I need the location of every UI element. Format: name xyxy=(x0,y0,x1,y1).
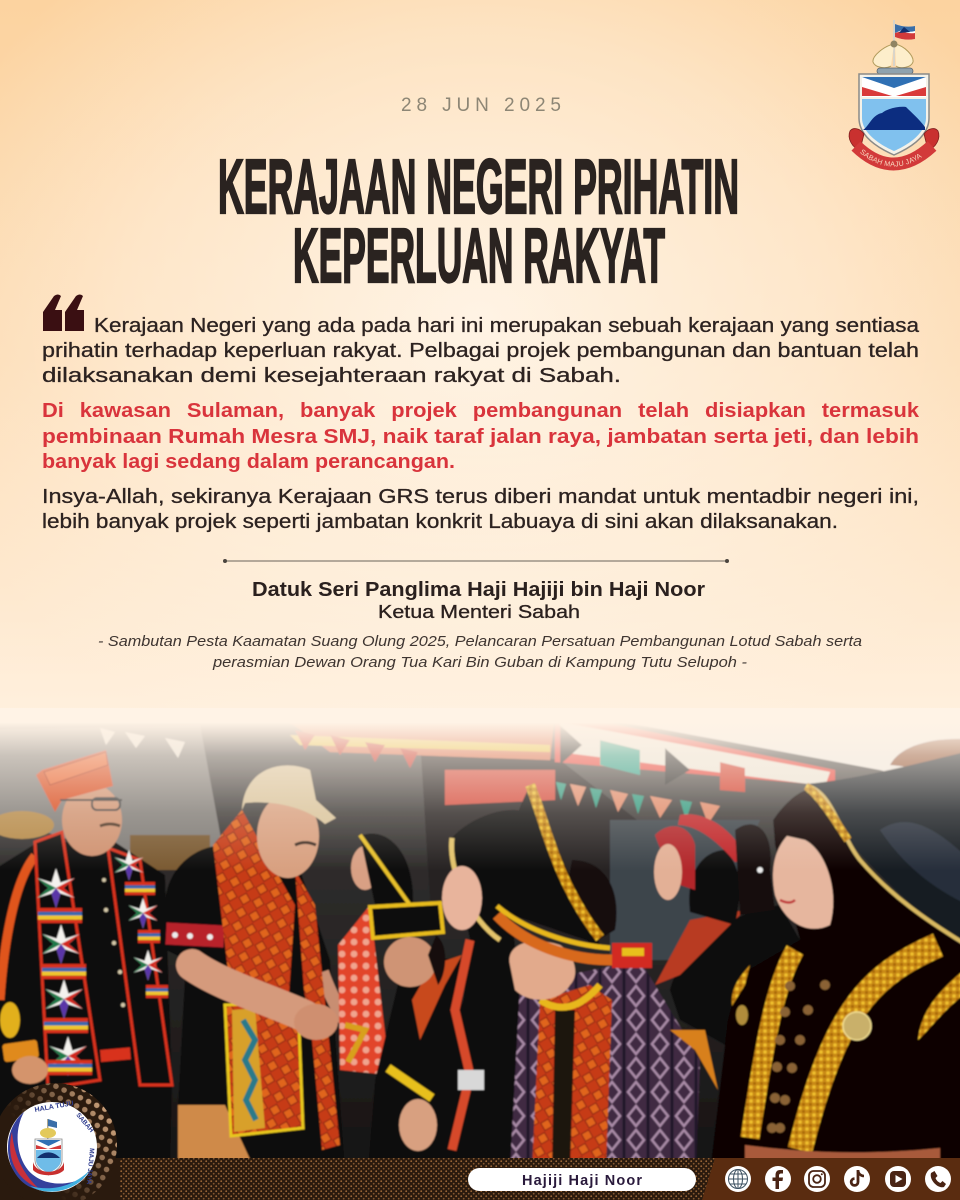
shield xyxy=(859,74,929,155)
event caption: - Sambutan Pesta Kaamatan Suang Olung 2025, Pelancaran Persatuan Pembangunan Lotud Sabah serta xyxy=(98,633,862,650)
icon: globe xyxy=(725,1166,751,1192)
head of state with cap and red sash xyxy=(165,766,345,1170)
photo scene xyxy=(0,726,960,1158)
state crest top right xyxy=(848,20,940,170)
girl with red floral dress xyxy=(338,833,420,1075)
name pill xyxy=(468,1168,696,1191)
speaker name and title: Datuk Seri Panglima Haji Hajiji bin Haji Noor xyxy=(252,579,705,601)
paragraph two highlighted in red: banyak lagi sedang dalam perancangan. xyxy=(42,451,455,473)
bunting and woven tent banners xyxy=(0,712,835,870)
divider line xyxy=(223,559,729,563)
paragraph three: lebih banyak projek seperti jambatan konkrit Labuaya di sini akan dilaksanakan. xyxy=(42,511,838,533)
paragraph two highlighted in red: pembinaan Rumah Mesra SMJ, naik taraf jalan raya, jambatan serta jeti, dan lebih xyxy=(42,426,919,448)
halftone circle xyxy=(0,1080,120,1200)
child in hood xyxy=(398,810,520,1158)
badge ring text: MAJU JAYA xyxy=(85,1148,95,1185)
badge ring text: SABAH xyxy=(74,1112,95,1134)
speaker name and title xyxy=(252,579,705,622)
icon: instagram xyxy=(804,1166,830,1192)
paragraph one: Kerajaan Negeri yang ada pada hari ini merupakan sebuah kerajaan yang sentiasa xyxy=(94,315,920,337)
event caption: perasmian Dewan Orang Tua Kari Bin Guban di Kampung Tutu Selupoh - xyxy=(212,654,747,671)
badge mini crest xyxy=(33,1119,64,1175)
paragraph two highlighted in red xyxy=(42,400,920,473)
ribbon SABAH MAJU JAYA: SABAH MAJU JAYA xyxy=(860,150,922,166)
ribbon SABAH MAJU JAYA xyxy=(848,128,940,170)
bottom footer bar xyxy=(0,1158,960,1200)
event caption xyxy=(98,633,862,671)
paragraph one: prihatin terhadap keperluan rakyat. Pelbagai projek pembangunan dan bantuan telah xyxy=(42,340,919,362)
paragraph three xyxy=(42,486,919,533)
girl in black hood on right xyxy=(710,739,960,1170)
social media icons xyxy=(725,1166,951,1192)
tent background xyxy=(0,726,950,1158)
photo: officials greeting children in traditional dress xyxy=(0,700,960,1180)
white badge with swoosh xyxy=(7,1102,97,1192)
paragraph three: Insya-Allah, sekiranya Kerajaan GRS terus diberi mandat untuk mentadbir negeri ini, xyxy=(42,486,919,508)
speaker name and title: Ketua Menteri Sabah xyxy=(378,602,580,622)
boy with black and gold hat xyxy=(345,903,465,1170)
badge ring text xyxy=(34,1100,95,1185)
name pill: Hajiji Haji Noor xyxy=(522,1173,642,1189)
circular logo badge bottom left xyxy=(0,1080,120,1200)
badge ring text: HALA TUJU xyxy=(34,1100,74,1114)
icon: phone xyxy=(925,1166,951,1192)
main title xyxy=(218,144,739,299)
paragraph one xyxy=(42,315,920,387)
icon: youtube play xyxy=(885,1166,911,1192)
man on left with sash xyxy=(0,750,172,1170)
flag on pole xyxy=(893,20,915,66)
paragraph two highlighted in red: Di kawasan Sulaman, banyak projek pembangunan telah disiapkan termasuk xyxy=(42,400,920,422)
girl in red headdress xyxy=(654,814,800,1090)
top fade over photo xyxy=(0,706,960,871)
icon: facebook xyxy=(765,1166,791,1192)
icon: tiktok xyxy=(844,1166,870,1192)
paragraph one: dilaksanakan demi kesejahteraan rakyat di Sabah. xyxy=(42,365,621,387)
date: 28 JUN 2025 xyxy=(401,95,561,116)
icon: opening quotation mark xyxy=(43,294,84,331)
crest arms and wreath xyxy=(873,40,913,74)
boy with tall hat and woven cloth xyxy=(497,785,700,1170)
